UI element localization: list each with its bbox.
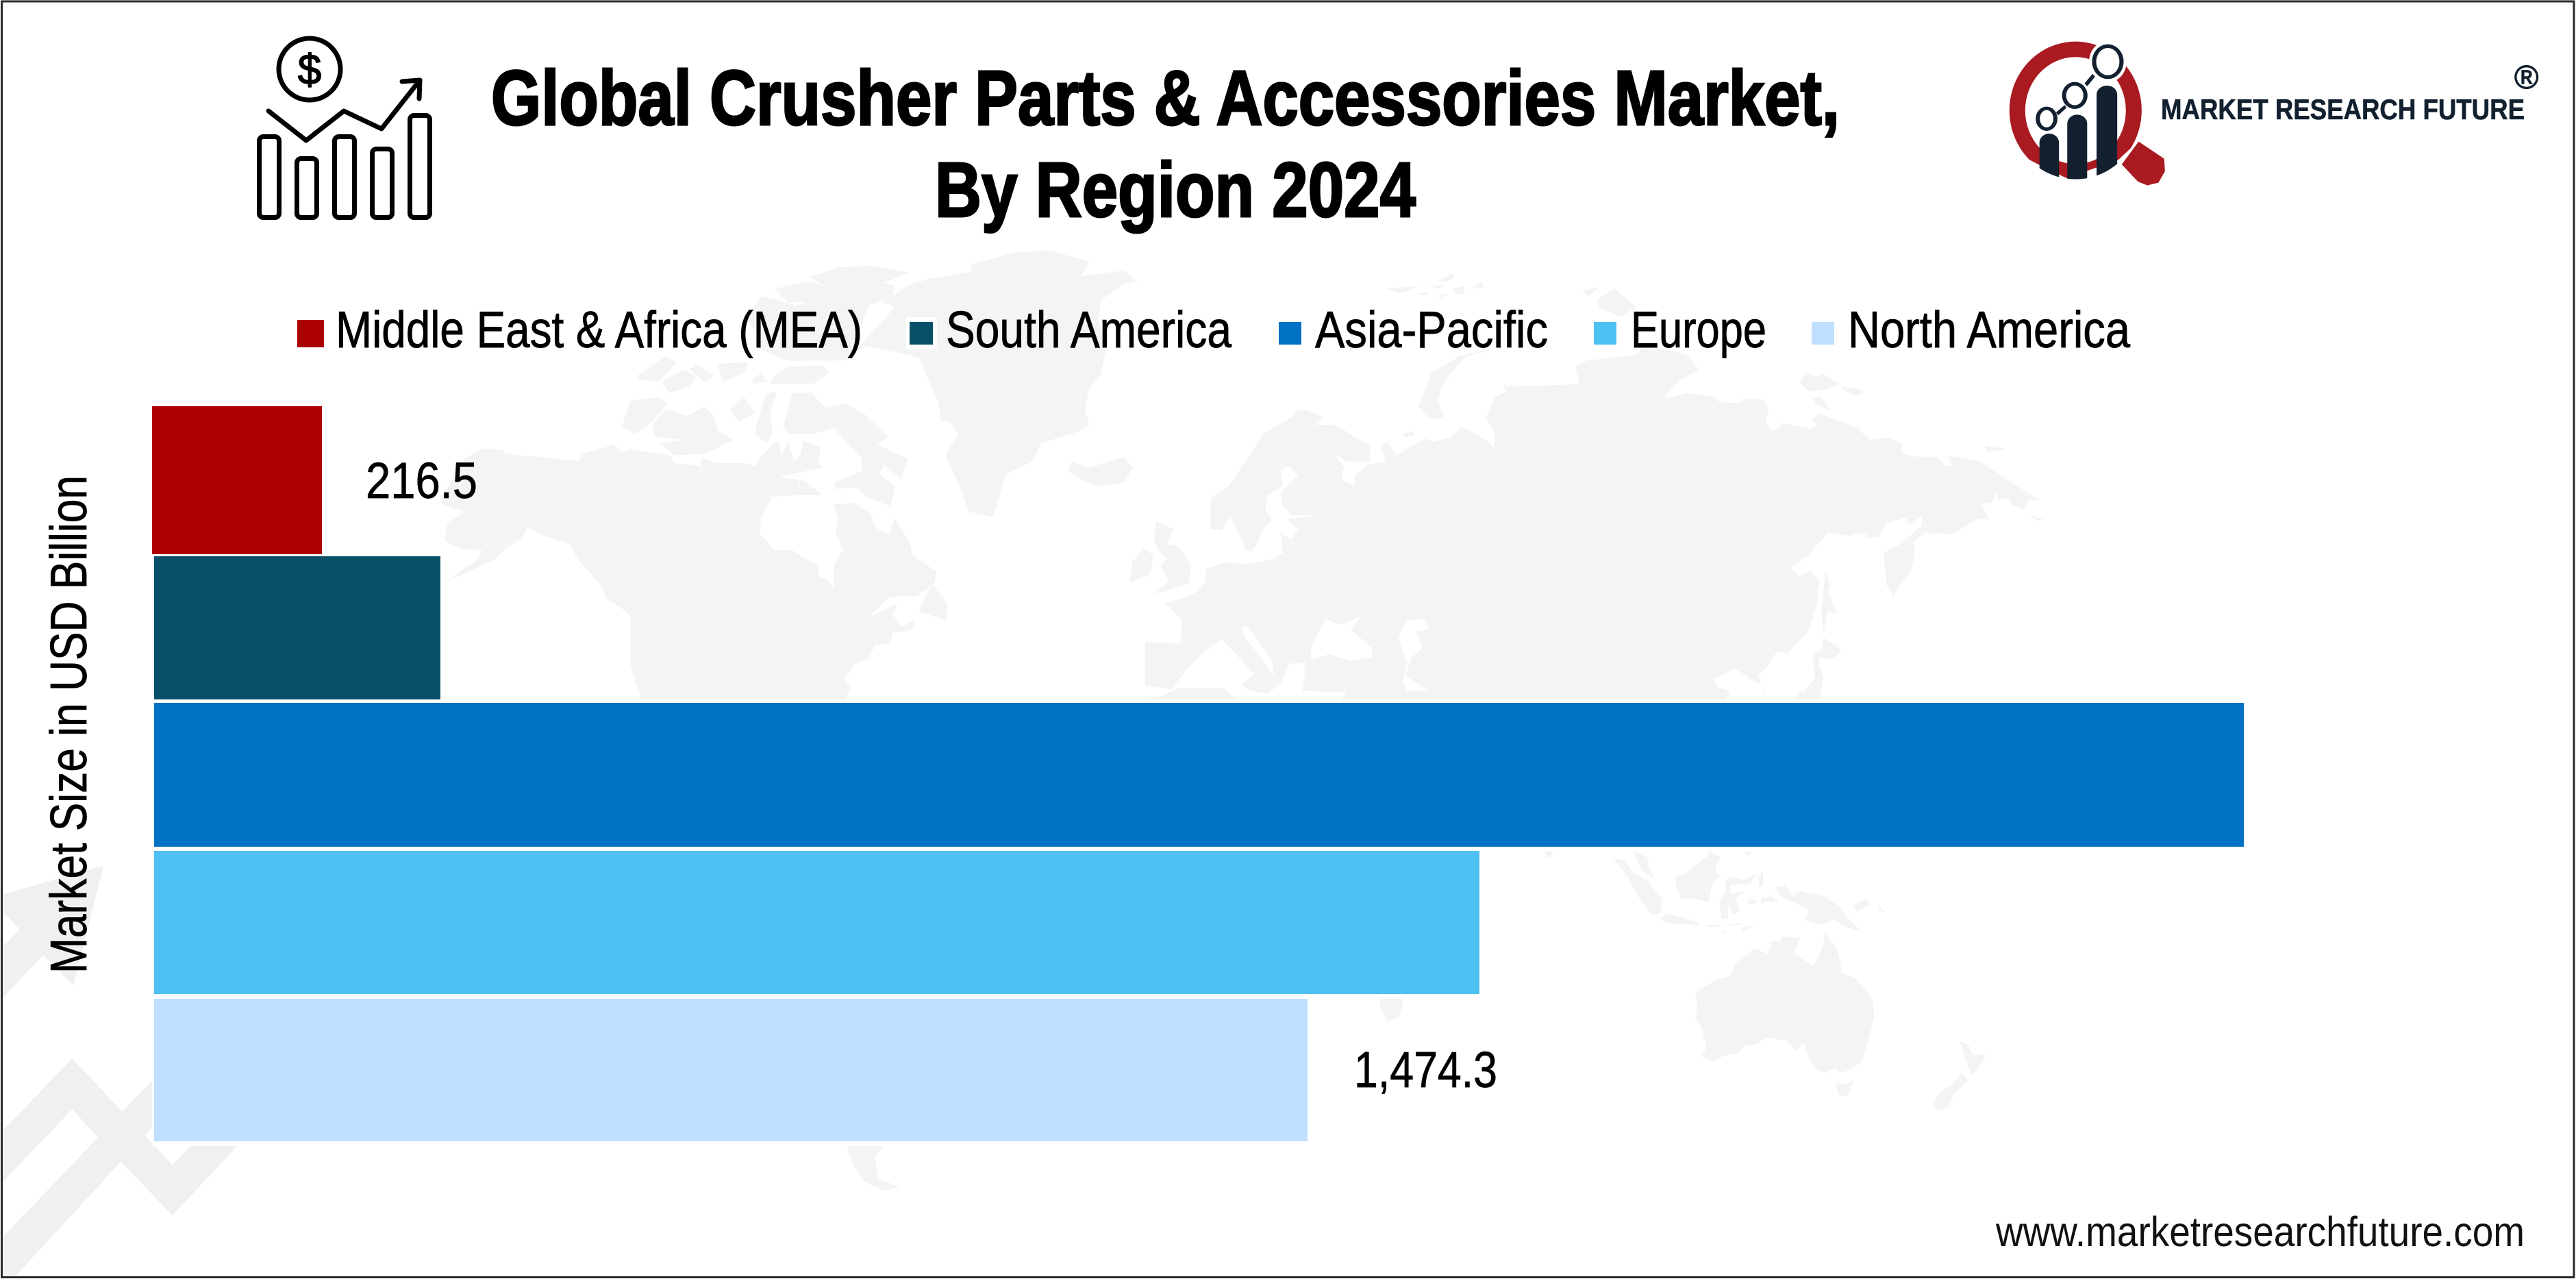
icon: dollar coin with growth chart bbox=[259, 38, 430, 218]
map: inland seas cut-outs bbox=[1141, 616, 1766, 699]
bar: South America bbox=[154, 556, 440, 699]
bar: Europe bbox=[154, 851, 1479, 994]
logo: Market Research Future bbox=[2010, 41, 2538, 188]
source website: www.marketresearchfuture.com bbox=[1995, 1208, 2525, 1255]
y axis label: Market Size in USD Billion bbox=[40, 475, 97, 973]
title bbox=[491, 55, 1840, 233]
legend bbox=[297, 301, 2130, 358]
logo: magnifier handle bbox=[2122, 142, 2165, 186]
legend item: Europe: Europe bbox=[1631, 301, 1766, 358]
logo: trend line nodes bbox=[2036, 41, 2127, 131]
map: eastern asia bbox=[1507, 348, 2044, 699]
logo: magnifier ring bbox=[2010, 42, 2142, 179]
chevron arrow watermark bbox=[2, 866, 262, 1277]
legend item: South America: South America bbox=[946, 301, 1231, 358]
logo: registered mark: ® bbox=[2514, 60, 2538, 96]
legend item: Middle East & Africa: Middle East & Africa (MEA) bbox=[336, 301, 862, 358]
logo: navy bars bbox=[2040, 86, 2117, 188]
value label: North America: 1,474.3 bbox=[1354, 1041, 1497, 1098]
legend item: Europe bbox=[1594, 301, 1766, 358]
map: europe and western asia bbox=[1130, 273, 1808, 699]
map: south america tip bbox=[847, 1145, 900, 1191]
map: north america and greenland bbox=[440, 251, 1137, 699]
title: Global Crusher Parts & Accessories Market, bbox=[491, 55, 1840, 141]
bar chart: market size by region bbox=[152, 406, 2249, 1146]
bar: Asia-Pacific bbox=[154, 703, 2244, 847]
title: By Region 2024 bbox=[935, 147, 1416, 233]
legend item: Asia-Pacific: Asia-Pacific bbox=[1315, 301, 1548, 358]
bar: North America bbox=[154, 999, 1308, 1141]
map: oceania and south-east asia bbox=[1379, 851, 1986, 1110]
legend item: North America: North America bbox=[1848, 301, 2130, 358]
value label: Middle East & Africa: 216.5 bbox=[366, 452, 477, 509]
logo: wordmark: MARKET RESEARCH FUTURE bbox=[2161, 93, 2525, 125]
icon: dollar coin with growth chart: $ bbox=[298, 47, 321, 94]
bar: Middle East & Africa bbox=[152, 406, 322, 554]
world map watermark bbox=[440, 251, 2044, 1191]
